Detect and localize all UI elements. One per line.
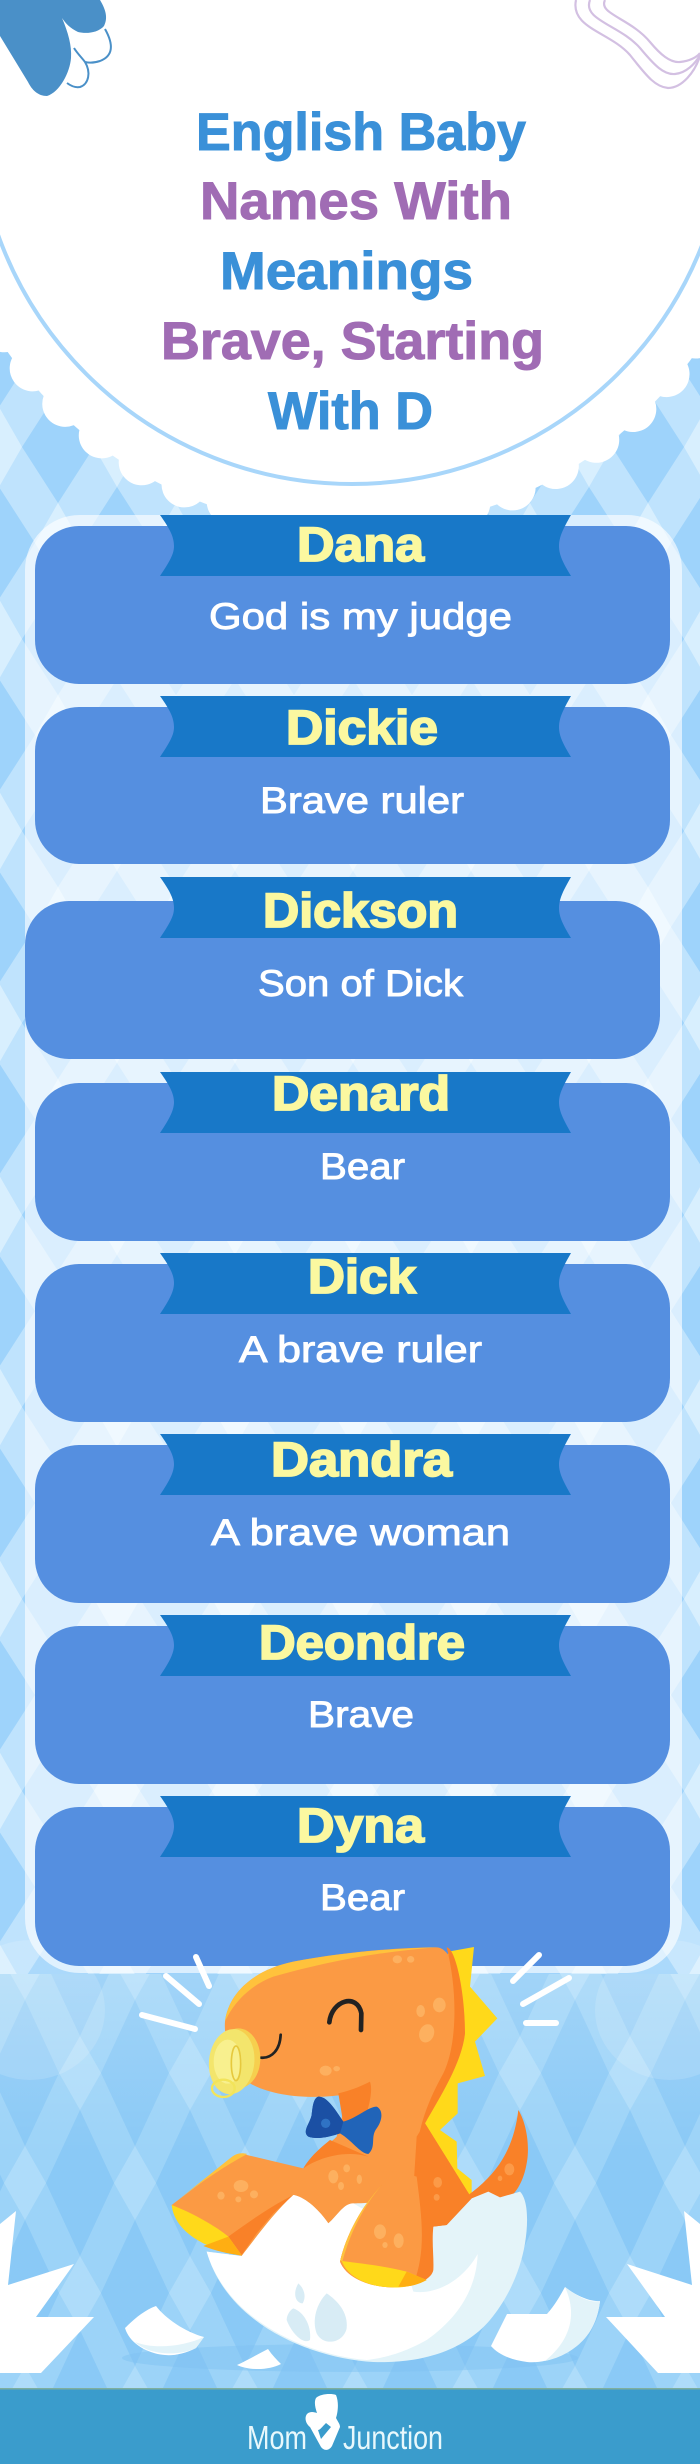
- logo wordmark right: Junction: [343, 2419, 443, 2456]
- illustration: baby dinosaur hatching from egg: [172, 1947, 528, 2362]
- card: Dickson: Son of Dick: [258, 963, 464, 1004]
- card: Dana: God is my judge: [209, 596, 512, 637]
- chest shade: [303, 2140, 368, 2168]
- logo mark: mother and child silhouette: [306, 2394, 340, 2450]
- title: With D: [268, 382, 433, 441]
- card: Dyna: Dyna: [297, 1800, 424, 1853]
- card: Dandra: Dandra: [271, 1434, 452, 1487]
- card: Dickie: [35, 696, 670, 864]
- arm underside shade: [228, 2195, 293, 2255]
- left foot tip: [203, 2237, 242, 2255]
- arm highlight: [172, 2153, 247, 2205]
- dinosaur body: [172, 1947, 472, 2287]
- title: Brave, Starting: [161, 312, 544, 371]
- icon: purple wavy lines top right: [575, 0, 700, 88]
- head highlight: [225, 1947, 437, 2022]
- card: Dickson: Dickson: [263, 885, 458, 938]
- decoration: white spiky corner left: [0, 2211, 94, 2373]
- card: Dickson: [25, 877, 660, 1059]
- left foot: [172, 2205, 242, 2255]
- card: Dickie: Brave ruler: [260, 780, 464, 821]
- skin spots: [217, 1955, 514, 2248]
- card: Deondre: Brave: [308, 1694, 414, 1735]
- bow tie: [306, 2097, 381, 2154]
- open eye: [329, 2001, 361, 2030]
- card: Dyna: Bear: [320, 1877, 405, 1918]
- card: Dandra: [35, 1434, 670, 1603]
- card: Dana: Dana: [297, 519, 424, 572]
- card: Denard: Bear: [320, 1146, 405, 1187]
- card: Dick: A brave ruler: [239, 1329, 482, 1370]
- pacifier: [206, 2027, 260, 2097]
- dinosaur dark side shade: [413, 1947, 472, 2284]
- title: [161, 103, 544, 441]
- panel: name list backing: [25, 515, 682, 1973]
- card: Dandra: A brave woman: [211, 1512, 510, 1553]
- title badge: scalloped white circle: [0, 0, 700, 530]
- card: Dick: [35, 1251, 670, 1422]
- closed eye: [261, 2035, 281, 2058]
- decoration: white spiky corner right: [606, 2211, 700, 2373]
- egg white front: [207, 2195, 478, 2360]
- title: Names With: [200, 172, 512, 231]
- dinosaur tail: [468, 2110, 528, 2217]
- logo wordmark left: Mom: [247, 2419, 307, 2456]
- sparkle lines around dinosaur: [142, 1955, 569, 2029]
- card: Dickie: Dickie: [286, 702, 438, 755]
- card: Deondre: Deondre: [259, 1617, 465, 1670]
- logo: MomJunction: [247, 2394, 443, 2456]
- card: Dyna: [35, 1796, 670, 1966]
- front foot tip: [398, 2272, 427, 2287]
- chin shade: [338, 2082, 371, 2140]
- front foot: [342, 2261, 427, 2287]
- dinosaur spikes: [425, 1947, 497, 2203]
- card: Denard: [35, 1068, 670, 1241]
- front leg: [340, 2170, 422, 2287]
- front leg highlight: [340, 2185, 382, 2262]
- card: Dana: [35, 515, 670, 684]
- egg spots: [287, 2283, 347, 2342]
- card: Denard: Denard: [272, 1068, 450, 1121]
- egg shard small: [237, 2349, 281, 2369]
- egg shard right: [491, 2287, 600, 2362]
- egg shard left: [125, 2306, 204, 2355]
- card: Deondre: [35, 1615, 670, 1784]
- title: English Baby: [196, 103, 527, 162]
- ground shadow: [122, 2344, 578, 2372]
- icon: blue feather corner top left: [0, 0, 111, 96]
- title: Meanings: [220, 242, 473, 301]
- footer bar: [0, 2388, 700, 2464]
- egg shell: [207, 2192, 527, 2362]
- front leg shade: [340, 2123, 472, 2287]
- card: Dick: Dick: [308, 1251, 416, 1304]
